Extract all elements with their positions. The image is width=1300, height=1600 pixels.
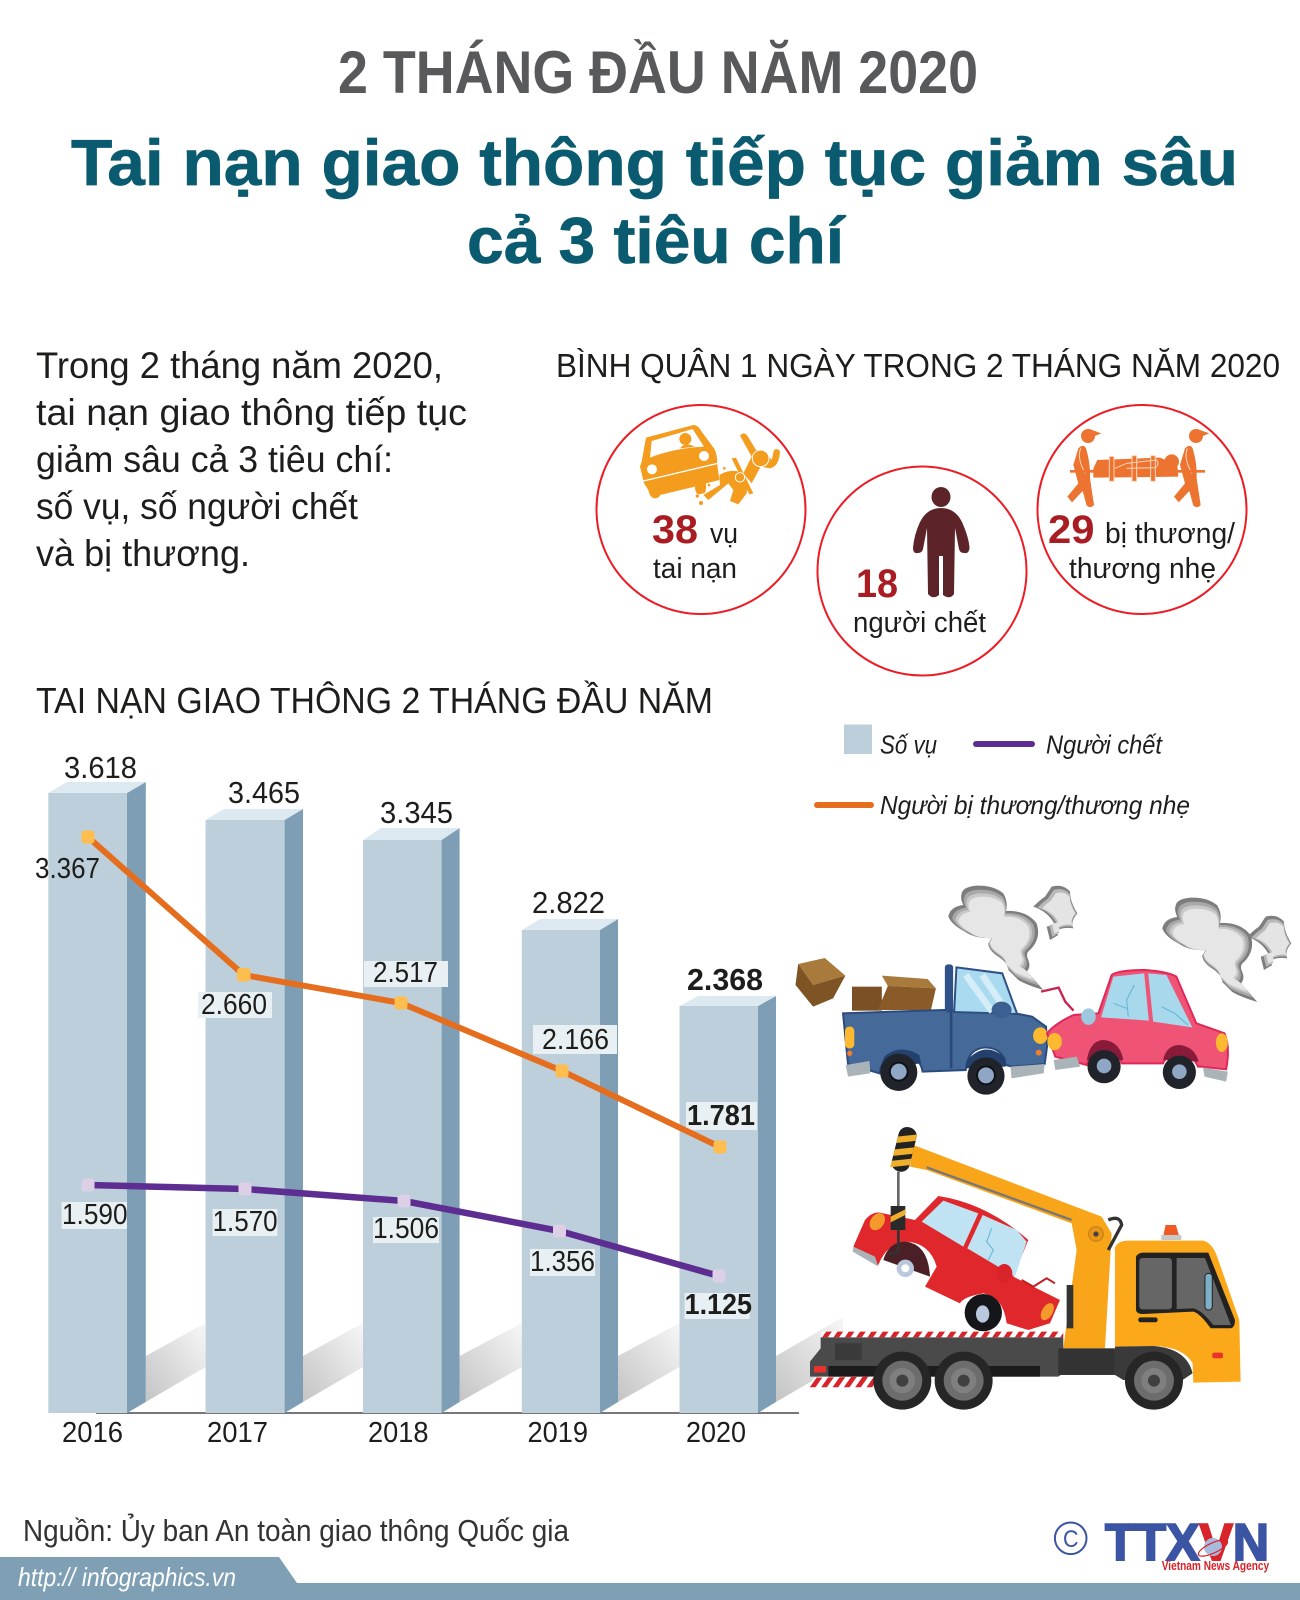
truck chassis bbox=[808, 1332, 1115, 1387]
title: main heading bbox=[71, 126, 1238, 277]
panel: injuries per day bbox=[1038, 405, 1246, 614]
legend: Người bị thương/thương nhẹ bbox=[880, 790, 1190, 820]
axis line bbox=[96, 1412, 799, 1414]
values: accidents: 3.465 bbox=[228, 775, 300, 810]
values: injured bbox=[35, 853, 755, 1132]
line: injured bbox=[82, 830, 726, 1154]
panel: accidents per day: 38 bbox=[652, 508, 698, 552]
panel: injuries per day: bị thương/ bbox=[1105, 518, 1236, 550]
panel: deaths per day: 18 bbox=[856, 562, 898, 606]
values: injured: 1.781 bbox=[687, 1100, 755, 1132]
year axis labels: 2016 bbox=[62, 1417, 123, 1449]
footer bar bbox=[0, 1557, 1300, 1600]
bar shadows bbox=[146, 1317, 843, 1402]
year axis labels: 2017 bbox=[207, 1417, 268, 1449]
logo: TTXVN: TTXVN bbox=[1105, 1514, 1269, 1572]
icon: stretcher bearers bbox=[1067, 429, 1209, 507]
bar 2019 bbox=[522, 919, 618, 1413]
values: accidents bbox=[64, 750, 763, 997]
values: deaths bbox=[62, 1199, 752, 1321]
panel: deaths per day bbox=[818, 466, 1026, 676]
title: period heading: 2 THÁNG ĐẦU NĂM 2020 bbox=[338, 39, 978, 106]
year axis labels bbox=[62, 1417, 746, 1449]
values: deaths: 1.590 bbox=[62, 1199, 128, 1231]
footer bar: http:// infographics.vn bbox=[18, 1562, 236, 1592]
red car bbox=[1041, 970, 1228, 1089]
truck cab bbox=[1115, 1225, 1241, 1383]
values: accidents: 3.345 bbox=[380, 795, 453, 830]
legend bbox=[817, 724, 1190, 820]
panel: accidents per day: tai nạn bbox=[653, 553, 737, 585]
values: injured: 3.367 bbox=[35, 853, 100, 885]
bar 2017 bbox=[206, 809, 303, 1413]
intro text block: số vụ, số người chết bbox=[36, 486, 359, 527]
icon: car hitting motorbike bbox=[640, 425, 780, 505]
bar 2016 bbox=[48, 782, 146, 1413]
values: deaths: 1.356 bbox=[530, 1246, 595, 1278]
illustration: car crash bbox=[796, 958, 1228, 1095]
heading: daily average: BÌNH QUÂN 1 NGÀY TRONG 2 THÁNG NĂM 2020 bbox=[556, 347, 1280, 384]
panel: deaths per day: người chết bbox=[853, 607, 986, 639]
panel: accidents per day: vụ bbox=[710, 518, 738, 550]
year axis labels: 2019 bbox=[528, 1417, 588, 1449]
illustration: tow truck bbox=[808, 1125, 1241, 1410]
source note: Nguồn: Ủy ban An toàn giao thông Quốc gia bbox=[23, 1512, 570, 1548]
values: deaths: 1.125 bbox=[685, 1289, 752, 1321]
legend: Số vụ bbox=[880, 730, 937, 760]
intro text block bbox=[36, 345, 467, 574]
title: main heading: cả 3 tiêu chí bbox=[467, 204, 846, 277]
year axis labels: 2018 bbox=[368, 1417, 428, 1449]
logo: TTXVN: Vietnam News Agency bbox=[1162, 1558, 1270, 1573]
truck wheels bbox=[873, 1352, 1183, 1410]
legend: Người chết bbox=[1046, 730, 1164, 760]
illustration: smoke clouds bbox=[948, 886, 1291, 1002]
bar 2018 bbox=[363, 828, 460, 1413]
values: deaths: 1.506 bbox=[373, 1213, 439, 1245]
title: main heading: Tai nạn giao thông tiếp tục giảm sâu bbox=[71, 126, 1238, 199]
panel: injuries per day: thương nhẹ bbox=[1069, 553, 1216, 585]
crates bbox=[796, 958, 936, 1011]
values: injured: 2.166 bbox=[542, 1024, 609, 1056]
panel: accidents per day bbox=[596, 405, 806, 614]
year axis labels: 2020 bbox=[686, 1417, 746, 1449]
tow boom bbox=[890, 1125, 1122, 1348]
intro text block: tai nạn giao thông tiếp tục bbox=[36, 392, 467, 433]
values: injured: 2.660 bbox=[201, 989, 267, 1021]
heading: chart title: TAI NẠN GIAO THÔNG 2 THÁNG ĐẦU NĂM bbox=[36, 680, 713, 721]
label backgrounds bbox=[62, 961, 757, 1319]
values: accidents: 2.368 bbox=[687, 962, 763, 997]
values: accidents: 3.618 bbox=[64, 750, 137, 785]
values: accidents: 2.822 bbox=[532, 885, 605, 920]
bar 2020 bbox=[680, 996, 776, 1413]
wrecked red car bbox=[853, 1196, 1060, 1331]
logo: TTXVN: C bbox=[1063, 1526, 1078, 1553]
values: injured: 2.517 bbox=[373, 957, 438, 989]
chart: bars and lines bbox=[35, 750, 843, 1449]
blue pickup truck bbox=[843, 964, 1048, 1095]
values: deaths: 1.570 bbox=[213, 1206, 278, 1238]
line: deaths bbox=[82, 1178, 726, 1282]
icon: standing person bbox=[913, 487, 970, 597]
panel: injuries per day: 29 bbox=[1048, 508, 1094, 552]
intro text block: Trong 2 tháng năm 2020, bbox=[36, 345, 443, 386]
intro text block: giảm sâu cả 3 tiêu chí: bbox=[36, 439, 393, 480]
intro text block: và bị thương. bbox=[36, 533, 250, 574]
